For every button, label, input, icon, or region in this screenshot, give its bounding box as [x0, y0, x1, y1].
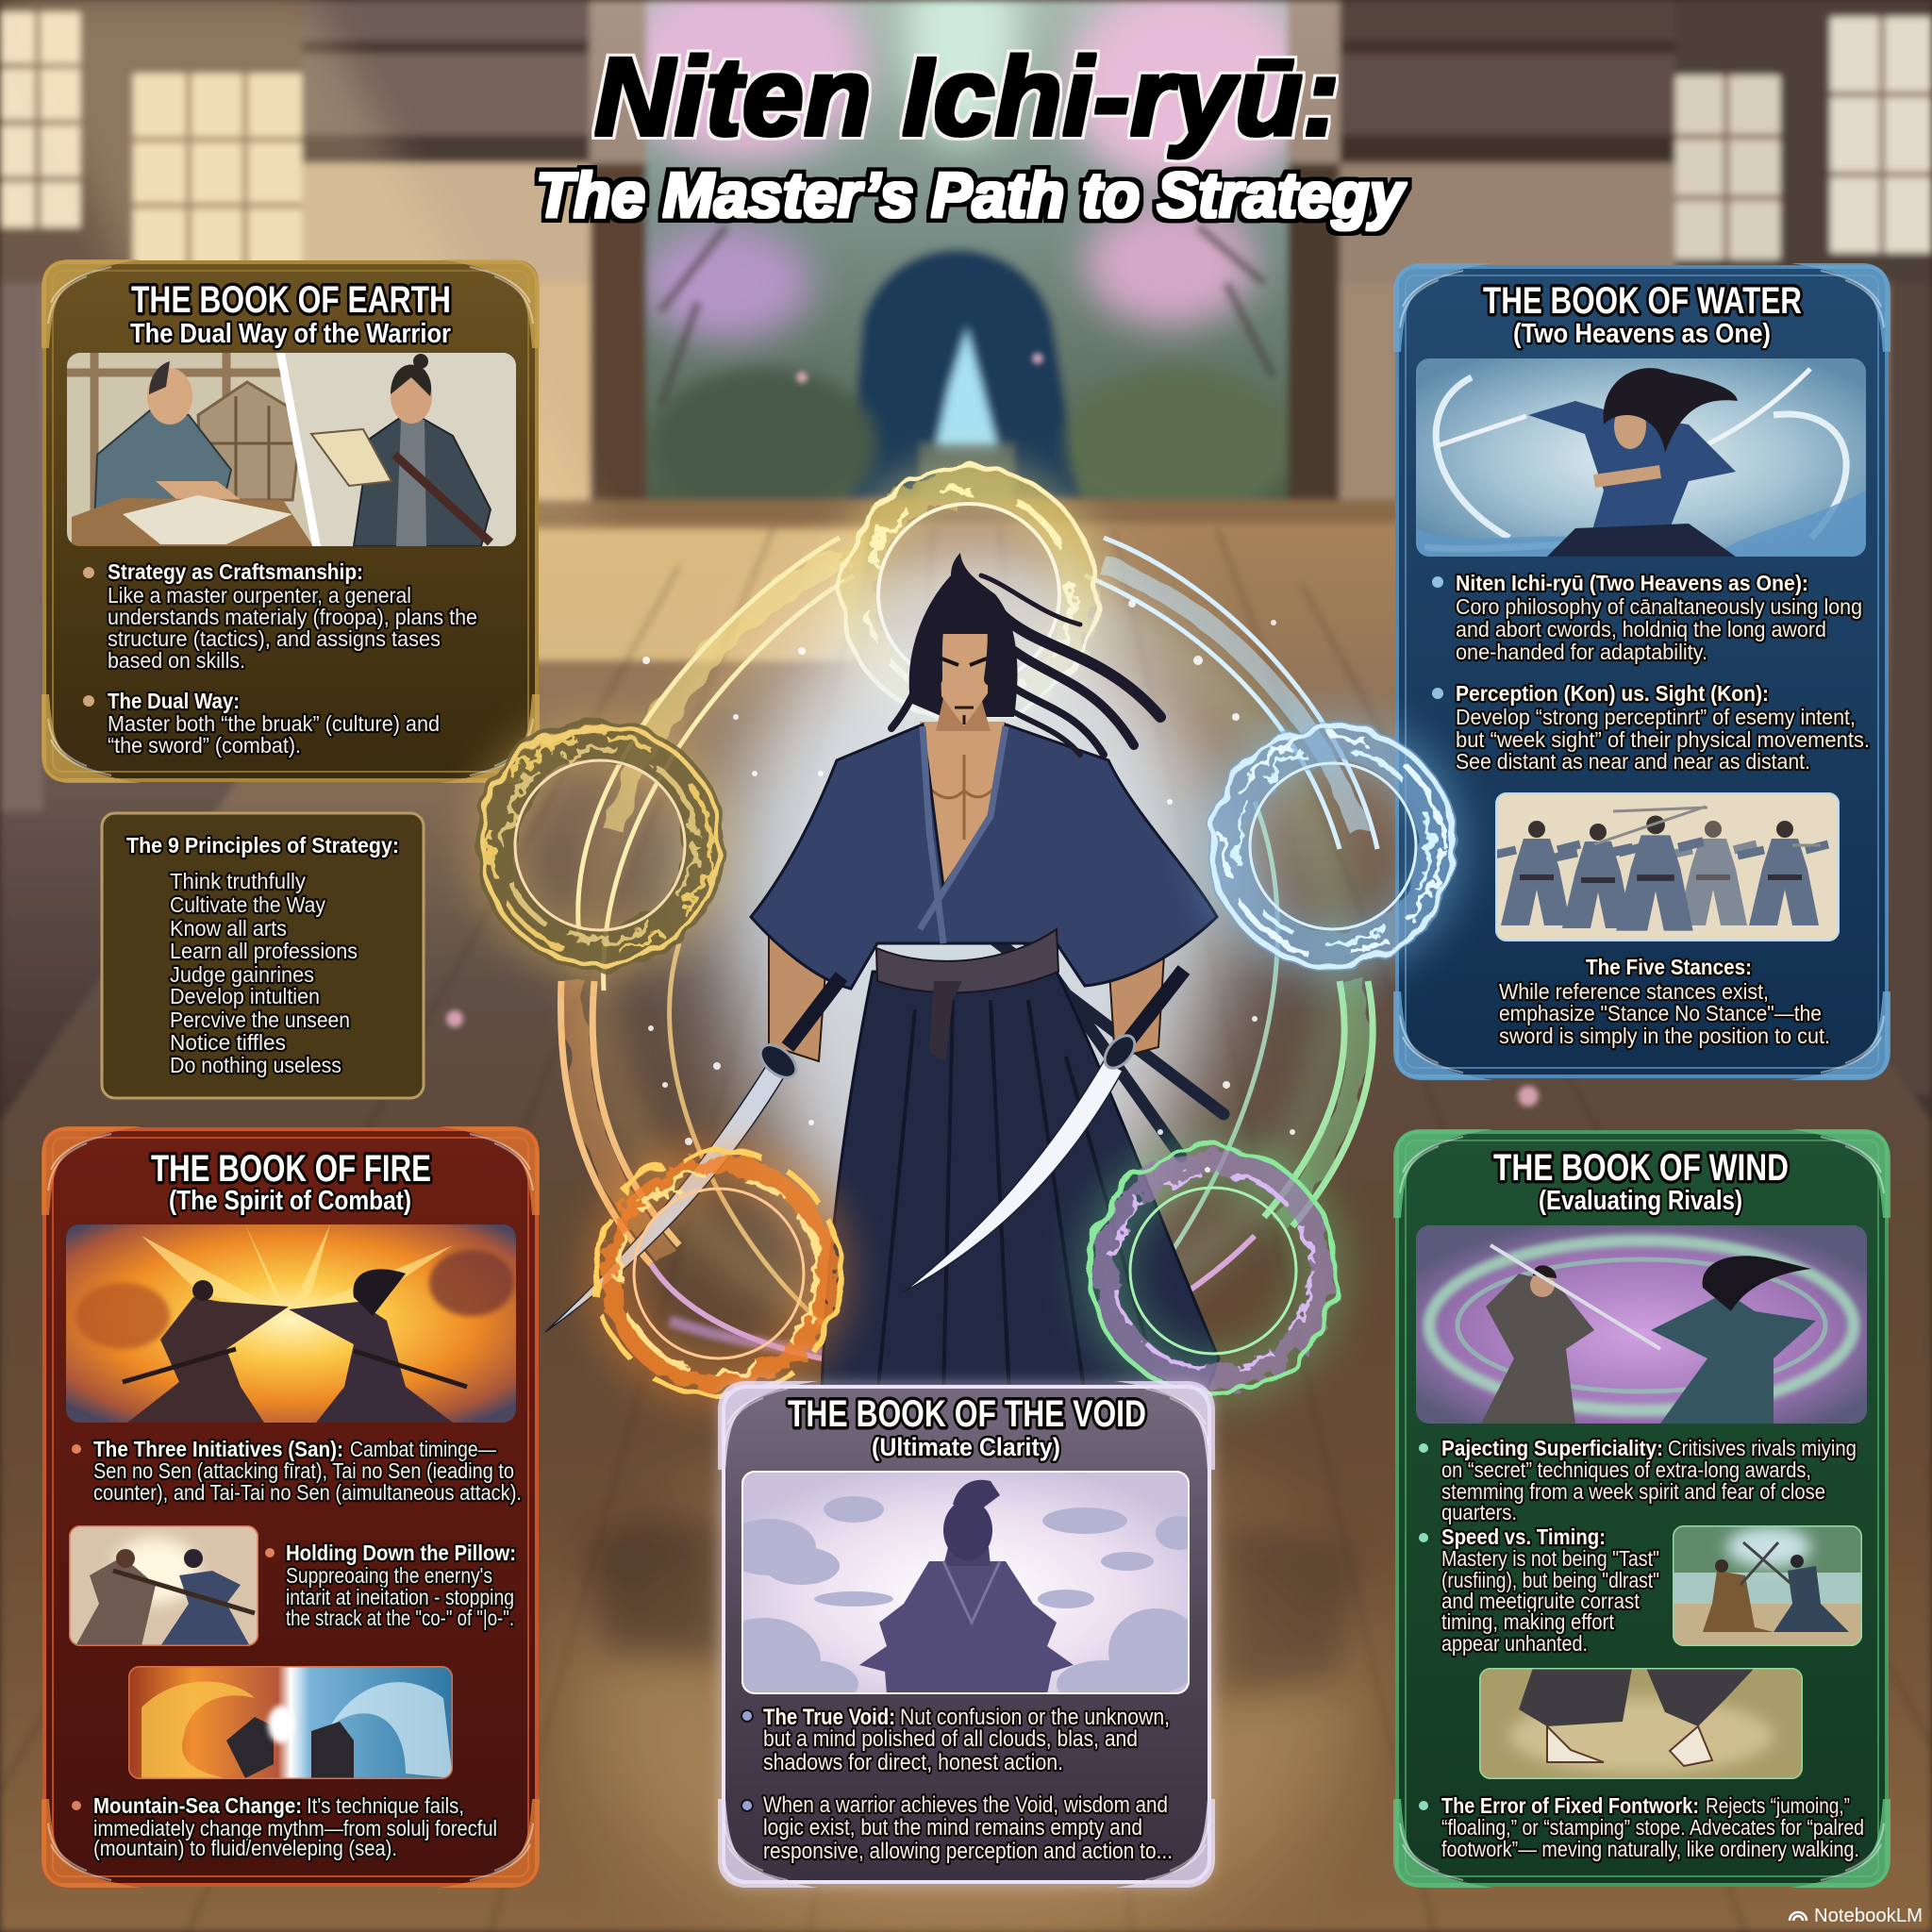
bullet: Rejecting Superficiality: on “secret” techniques of extra-long awards, [1441, 1457, 1811, 1482]
ring: water [1213, 726, 1453, 966]
bullet: Perception vs Sight: but “week sight” of their physical movements. [1456, 727, 1870, 752]
bullet: Holding Down the Pillow: Suppreoaing the enerny's [286, 1563, 492, 1588]
illustration: meditating silhouette [708, 1471, 1203, 1707]
bullet: Error of Fixed Footwork: “floaling,” or “stamping” stope. Advecates for “palred [1441, 1815, 1864, 1840]
bullet: Strategy as Craftsmanship [83, 559, 477, 673]
bullet: Mountain-Sea Change: (mountain) to fluid/enveleping (sea). [93, 1836, 397, 1860]
bullet: Speed vs Timing: Speed vs. Timing: [1441, 1524, 1606, 1549]
bullet: Speed vs Timing: timing, making effort [1441, 1609, 1615, 1634]
forest view through opening [623, 0, 1311, 519]
bullet: The True Void: shadows for direct, honest action. [763, 1750, 1063, 1775]
subheading: Ultimate Clarity: (Ultimate Clarity) [872, 1433, 1060, 1461]
bullet: The True Void: Nut confusion or the unknown, [900, 1705, 1170, 1730]
illustration: dual-sword swordsman in water [1416, 358, 1866, 566]
hair strands [891, 575, 1160, 755]
bullet: Speed vs Timing: (rusfiing), but being "dlrast" [1441, 1568, 1659, 1592]
connecting circle of energy [560, 538, 1377, 1371]
bullet: Mountain-Sea Change [72, 1793, 497, 1860]
text: The Five Stances: While reference stances exist, [1499, 979, 1769, 1004]
bullet: Error of Fixed Footwork [1419, 1793, 1864, 1861]
heading: Book of Fire: THE BOOK OF FIRE [151, 1148, 431, 1190]
bullet: Rejecting Superficiality: Pajecting Superficiality: [1441, 1436, 1663, 1460]
heading: Book of the Void: THE BOOK OF THE VOID [788, 1393, 1146, 1435]
bullet: The Dual Way: The Dual Way: [108, 689, 240, 713]
panel: Book of Wind [1393, 1129, 1890, 1888]
bullet: Perception vs Sight: Develop “strong perceptinrt” of esemy intent, [1456, 705, 1856, 729]
illustration: duel in green wind [1416, 1225, 1867, 1424]
panel: Book of Fire [42, 1126, 540, 1888]
bullet: Achieving the Void: logic exist, but the mind remains empty and [763, 1815, 1142, 1840]
bullet: Holding Down the Pillow [265, 1541, 516, 1630]
list: principles: Develop intultien [170, 984, 320, 1008]
list: principles: Learn all professions [170, 939, 358, 963]
bullet: Error of Fixed Footwork: footwork”— meving naturally, like ordinery walking. [1441, 1837, 1859, 1861]
bullet: Perception vs Sight [1432, 681, 1870, 774]
bullet: The Three Initiatives: Sen no Sen (attacking fīrat), Tai no Sen (ieading to [93, 1458, 514, 1483]
bullet: The Dual Way: Master both “the bruak” (culture) and [108, 711, 440, 736]
energy sparks and petals [446, 200, 1539, 1173]
bullet: The Three Initiatives: Cambat timinge— [350, 1437, 496, 1461]
bullet: Holding Down the Pillow: the strack at the "co-" of "|o-". [286, 1606, 514, 1630]
text: The Five Stances: emphasize "Stance No Stance"—the [1499, 1001, 1822, 1025]
watermark: NotebookLM: NotebookLM [1814, 1906, 1923, 1926]
list: principles: Cultivate the Way [170, 892, 325, 917]
illustration: clash of fire [66, 1224, 516, 1423]
text: The Five Stances: sword is simply in the position to cut. [1499, 1024, 1830, 1048]
left and right forearms [769, 929, 1165, 1061]
subheading: Two Heavens: (Two Heavens as One) [1513, 319, 1771, 349]
bullet: Speed vs Timing: Mastery is not being "Tast" [1441, 1546, 1659, 1571]
bullet: Niten Ichi-ryu: Coro philosophy of cānaltaneously using long [1456, 594, 1862, 619]
central warrior figure [545, 547, 1292, 1415]
list: principles: Notice tiffles [170, 1030, 286, 1055]
left hand sword [545, 1066, 785, 1332]
bullet: Achieving the Void: responsive, allowing perception and action to... [763, 1839, 1173, 1864]
heading: Book of Earth: THE BOOK OF EARTH [131, 279, 451, 321]
subheading: Spirit of Combat: (The Spirit of Combat) [169, 1186, 411, 1216]
neck and face [936, 698, 991, 731]
panel: Book of the Void [708, 1381, 1215, 1888]
ring: wind [1091, 1148, 1336, 1393]
panel: 9 Principles of Strategy [102, 813, 424, 1098]
bullet: The True Void [741, 1705, 1170, 1775]
illustration: natural footwork [1479, 1668, 1803, 1779]
bullet: Strategy as Craftsmanship: structure (tactics), and assigns tases [108, 626, 441, 651]
bullet: Error of Fixed Footwork: Rejects “jumoing,” [1706, 1793, 1850, 1818]
bullet: Perception vs Sight: See distant as near and near as distant. [1456, 749, 1810, 774]
panel: Book of Water [1393, 263, 1890, 1080]
bullet: Niten Ichi-ryu: one-handed for adaptability. [1456, 640, 1707, 664]
list: principles: Judge gainrines [170, 962, 314, 987]
bullet: Mountain-Sea Change: It's technique fails, [307, 1793, 464, 1818]
list: principles: Think truthfully [170, 869, 306, 893]
list: principles: Know all arts [170, 916, 287, 941]
title: Niten Ichi-ryū: [594, 35, 1340, 159]
illustration: mountain and sea [128, 1666, 453, 1779]
bullet: Niten Ichi-ryu: and abort cwords, holdniq the long aword [1456, 617, 1826, 641]
hair behind head [909, 553, 1017, 717]
bullet: Speed vs Timing [1419, 1524, 1659, 1656]
bullet: Niten Ichi-ryu [1432, 571, 1862, 664]
list: principles: Percvive the unseen [170, 1008, 350, 1032]
subtitle: The Master’s Path to Strategy [536, 159, 1407, 231]
subheading: Dual Way: The Dual Way of the Warrior [130, 319, 451, 349]
bullet: Achieving the Void: When a warrior achieves the Void, wisdom and [763, 1792, 1168, 1818]
bullet: The Three Initiatives: The Three Initiatives (San): [93, 1437, 343, 1461]
illustration: duel in forest [1673, 1525, 1862, 1646]
bullet: Speed vs Timing: appear unhanted. [1441, 1631, 1588, 1656]
bullet: Strategy as Craftsmanship: Strategy as Craftsmanship: [108, 559, 363, 584]
illustration: carpenter and samurai [67, 353, 516, 546]
bullet: Speed vs Timing: and meetigruite corrast [1441, 1589, 1641, 1613]
bullet: Mountain-Sea Change: Mountain-Sea Change: [93, 1793, 302, 1818]
belt [876, 929, 1058, 992]
bullet: Achieving the Void [741, 1792, 1173, 1864]
bullet: The Three Initiatives [72, 1437, 522, 1505]
bullet: Holding Down the Pillow: intarit at ineitation - stopping [286, 1585, 514, 1609]
ring: earth [481, 726, 719, 964]
heading: Book of Wind: THE BOOK OF WIND [1493, 1147, 1789, 1189]
bullet: Rejecting Superficiality: stemming from a week spirit and fear of close [1441, 1479, 1825, 1504]
bullet: Perception vs Sight: Perception (Kon) us. Sight (Kon): [1456, 681, 1769, 706]
illustration: grappling swordsmen [69, 1525, 258, 1646]
bullet: The Three Initiatives: counter), and Tai-Tai no Sen (aimultaneous attack). [93, 1480, 522, 1505]
bullet: Niten Ichi-ryu: Niten Ichi-ryū (Two Heavens as One): [1456, 571, 1808, 595]
bullet: Rejecting Superficiality [1419, 1436, 1857, 1524]
list: principles: Do nothing useless [170, 1053, 341, 1077]
bullet: Rejecting Superficiality: quarters. [1441, 1500, 1517, 1524]
illustration: five stances [1490, 792, 1840, 941]
list: principles [170, 869, 358, 1077]
heading: Book of Water: THE BOOK OF WATER [1483, 280, 1802, 322]
heading: principles: The 9 Principles of Strategy: [126, 833, 399, 858]
bullet: Strategy as Craftsmanship: understands materialy (froopa), plans the [108, 605, 477, 629]
text: The Five Stances: The Five Stances: [1586, 955, 1752, 979]
chest [920, 722, 1006, 887]
bullet: Mountain-Sea Change: immediately change mythm—from solulj forecful [93, 1816, 497, 1840]
kimono jacket [751, 724, 1217, 989]
sheathed swords [956, 904, 1224, 1157]
right hand sword [903, 1061, 1123, 1292]
ring: light (behind warrior) [841, 467, 1096, 722]
subheading: Evaluating Rivals: (Evaluating Rivals) [1539, 1186, 1742, 1216]
panel: Book of Earth [42, 259, 540, 783]
bullet: The Dual Way: “the sword” (combat). [108, 733, 301, 758]
bullet: The True Void: but a mind polished of all clouds, blas, and [763, 1726, 1138, 1752]
bullet: Rejecting Superficiality: Critisives rivals miying [1668, 1436, 1857, 1460]
bullet: Strategy as Craftsmanship: Like a master ourpenter, a general [108, 583, 411, 608]
bullet: The Dual Way [83, 689, 440, 758]
bullet: Error of Fixed Footwork: The Error of Fixed Fontwork: [1441, 1793, 1699, 1818]
bullet: The True Void: The True Void: [763, 1705, 895, 1730]
ring: fire [596, 1151, 841, 1396]
bullet: Holding Down the Pillow: Holding Down the Pillow: [286, 1541, 516, 1565]
text: The Five Stances [1499, 955, 1830, 1048]
bullet: Strategy as Craftsmanship: based on skills. [108, 648, 245, 673]
hakama trousers [821, 972, 1219, 1415]
